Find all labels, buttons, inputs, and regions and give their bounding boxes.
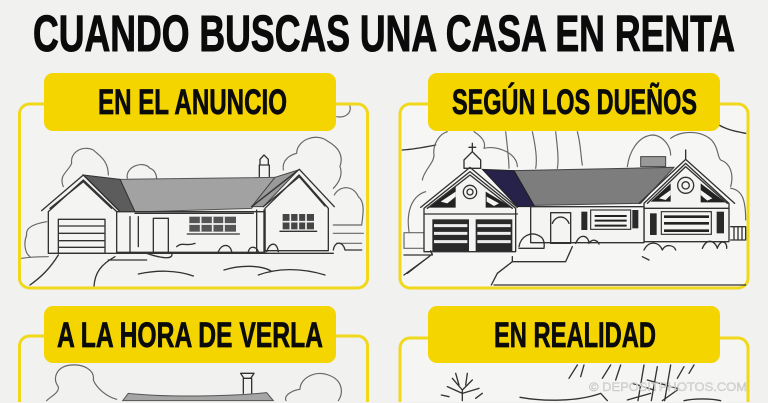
- label: a la hora de verla: A LA HORA DE VERLA: [57, 316, 323, 355]
- panel frame: [400, 104, 748, 288]
- panel: en el anuncio: [20, 73, 368, 288]
- panel frame: [20, 104, 368, 288]
- panel frame: [20, 336, 368, 402]
- watermark: © DEPOSITPHOTOS.COM: [589, 380, 747, 394]
- house drawing: house at viewing: [47, 365, 341, 401]
- panel frame: [400, 338, 748, 402]
- label: en realidad: [428, 306, 720, 363]
- panel: a la hora de verla: [20, 306, 368, 402]
- panel: en realidad: [400, 306, 748, 402]
- label: segun los duenos: [428, 73, 720, 131]
- house drawing: advertised house: [22, 106, 363, 286]
- label: en realidad: EN REALIDAD: [494, 316, 656, 355]
- panel: segun los duenos: [400, 73, 748, 288]
- label: en el anuncio: [44, 73, 336, 131]
- label: a la hora de verla: [44, 306, 336, 363]
- label: en el anuncio: EN EL ANUNCIO: [98, 83, 287, 122]
- house drawing: owner's description: [402, 125, 746, 285]
- house drawing: real house: [441, 365, 721, 401]
